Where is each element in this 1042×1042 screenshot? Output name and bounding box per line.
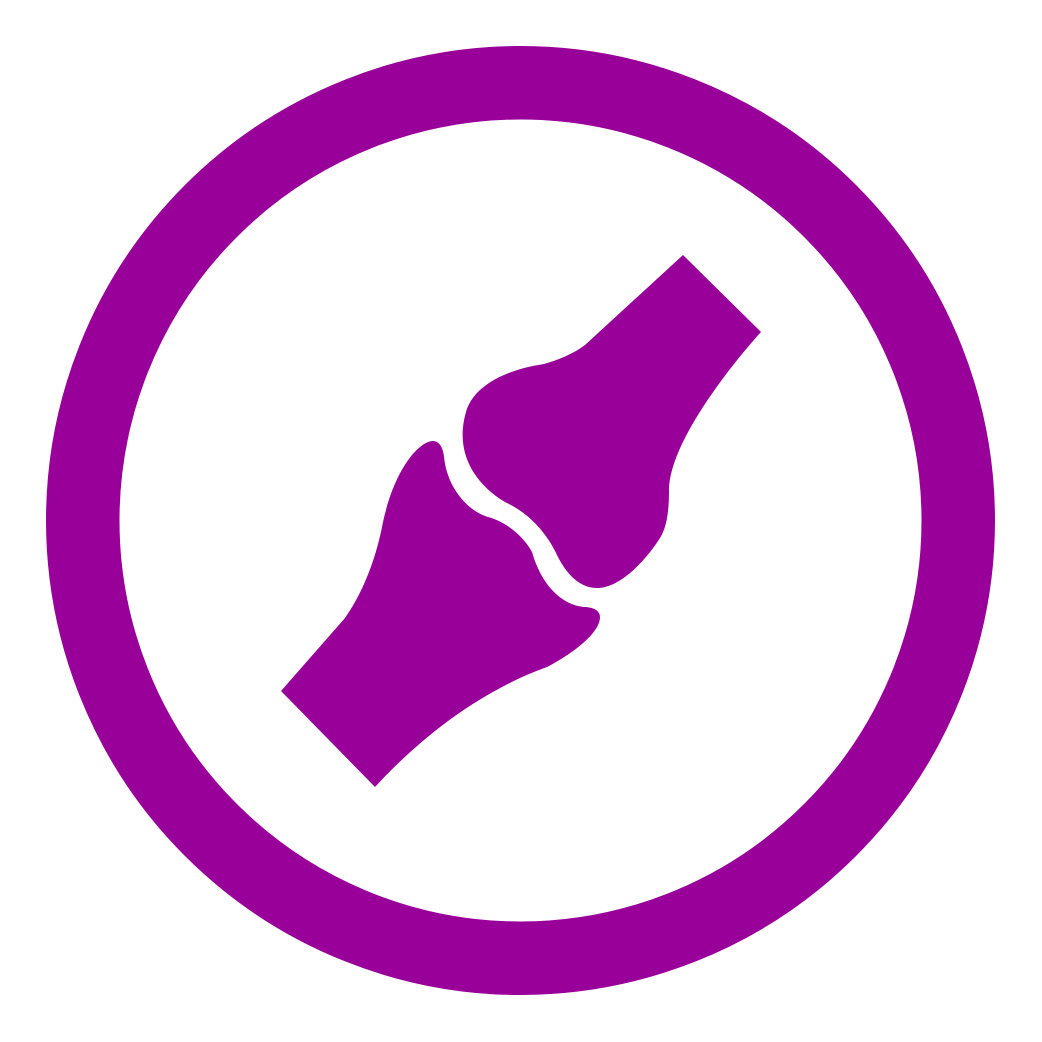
- ring: [83, 83, 958, 958]
- lower bone: [281, 441, 600, 787]
- upper bone: [463, 255, 761, 588]
